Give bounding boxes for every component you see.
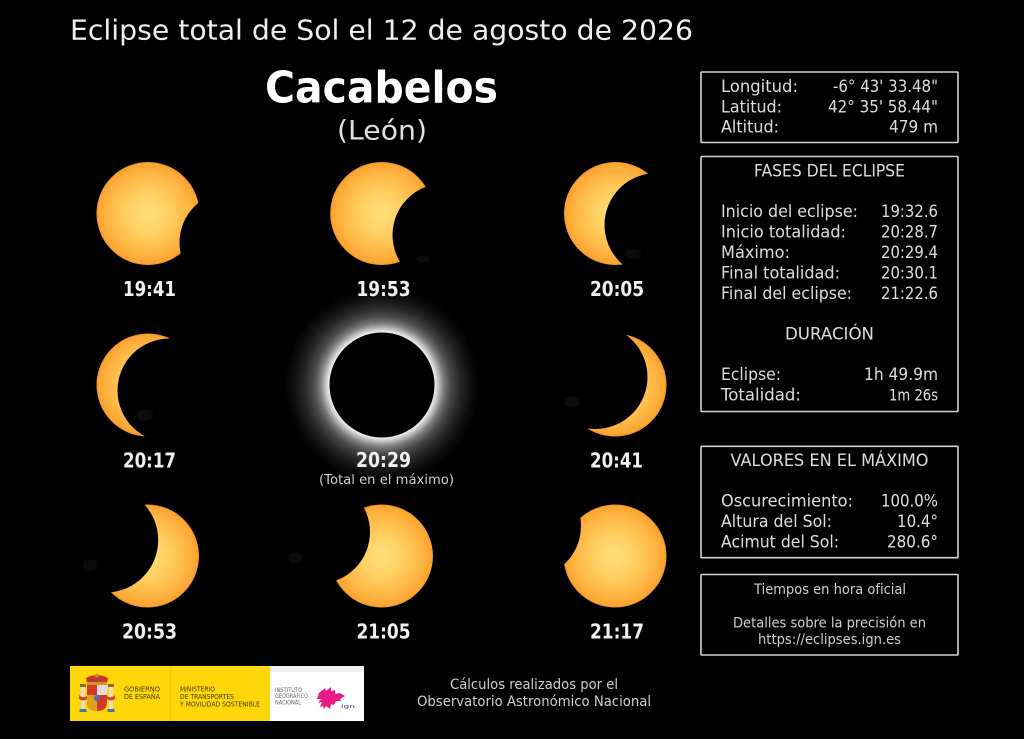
- panel: eclipse phases and duration: 19:32.6: [881, 202, 938, 222]
- logo text: institute: GEOGRÁFICO: [275, 693, 308, 700]
- panel: eclipse phases and duration: Final del eclipse:: [721, 284, 852, 304]
- totality with corona: [284, 287, 480, 483]
- phase 20:05: [564, 162, 708, 301]
- panel: values at maximum: 280.6°: [887, 532, 938, 552]
- panel: values at maximum: Altura del Sol:: [721, 512, 832, 532]
- logo text: ministry: [179, 686, 260, 708]
- panel: values at maximum: 100.0%: [881, 492, 938, 512]
- panel: eclipse phases and duration: 21:22.6: [881, 284, 938, 304]
- phase 19:41: [96, 162, 282, 301]
- panel: eclipse phases and duration: Inicio del eclipse:: [721, 202, 858, 222]
- phase 20:17: [96, 334, 222, 472]
- phase 19:53: [330, 162, 496, 301]
- logo text: institute: [275, 687, 308, 706]
- panel: values at maximum: [701, 446, 958, 558]
- phase 20:53: 20:53: [122, 620, 177, 644]
- panel: eclipse phases and duration: DURACIÓN: [785, 322, 874, 344]
- phase 20:17: 20:17: [123, 448, 176, 472]
- icon: coat of arms: [79, 674, 115, 712]
- title: Eclipse total de Sol el 12 de agosto de 2026: [70, 14, 693, 46]
- panel: coordinates: 42° 35' 58.44": [828, 97, 938, 117]
- panel: coordinates: Longitud:: [721, 77, 798, 97]
- total note: (Total en el máximo): [319, 472, 454, 488]
- logo text: government: [124, 686, 160, 701]
- panel: coordinates: -6° 43' 33.48": [833, 77, 938, 97]
- panel: notes: https://eclipses.ign.es: [758, 632, 901, 648]
- panel: coordinates: Latitud:: [721, 97, 782, 117]
- panel: eclipse phases and duration: Inicio totalidad:: [721, 222, 846, 242]
- phase 21:17: [477, 474, 666, 644]
- panel: eclipse phases and duration: 20:30.1: [881, 264, 938, 284]
- panel: eclipse phases and duration: [701, 156, 958, 412]
- panel: eclipse phases and duration: Final totalidad:: [721, 264, 840, 284]
- phase 21:05: 21:05: [356, 620, 410, 644]
- location name: Cacabelos: [265, 62, 498, 114]
- panel: notes: [701, 574, 958, 655]
- panel: eclipse phases and duration: Máximo:: [721, 243, 790, 263]
- phase 20:41: [544, 325, 666, 472]
- logo text: ministry: MINISTERIO: [180, 686, 215, 694]
- phase 19:53: 19:53: [356, 277, 410, 301]
- province: (León): [337, 116, 427, 146]
- panel: values at maximum: Acimut del Sol:: [721, 532, 839, 552]
- panel: coordinates: 479 m: [889, 118, 938, 138]
- panel: values at maximum: 10.4°: [897, 512, 938, 532]
- logo text: institute: INSTITUTO: [275, 687, 302, 694]
- phase 20:05: 20:05: [590, 277, 644, 301]
- icon: ign splash: [317, 687, 356, 710]
- panel: eclipse phases and duration: Eclipse:: [721, 365, 781, 385]
- panel: coordinates: Altitud:: [721, 118, 779, 138]
- credits: [417, 677, 651, 710]
- panel: values at maximum: VALORES EN EL MÁXIMO: [730, 449, 928, 471]
- icon: ign splash: ign: [341, 704, 356, 710]
- phase 21:17: 21:17: [590, 620, 644, 644]
- panel: notes: Tiempos en hora oficial: [753, 582, 906, 598]
- logo strip: [70, 666, 364, 721]
- phase 19:41: 19:41: [123, 277, 176, 301]
- phase 20:53: [53, 488, 199, 644]
- panel: eclipse phases and duration: 1m 26s: [889, 386, 938, 404]
- logo text: ministry: DE TRANSPORTES: [180, 693, 234, 701]
- panel: coordinates: [701, 72, 958, 142]
- credits: Cálculos realizados por el: [450, 677, 618, 693]
- logo text: institute: NACIONAL: [275, 700, 302, 706]
- panel: eclipse phases and duration: FASES DEL ECLIPSE: [754, 162, 905, 182]
- panel: values at maximum: Oscurecimiento:: [721, 492, 853, 512]
- panel: eclipse phases and duration: 20:28.7: [881, 222, 938, 242]
- time label 20:29: 20:29: [356, 448, 411, 472]
- phase 21:05: [267, 480, 433, 644]
- panel: eclipse phases and duration: Totalidad:: [720, 386, 801, 406]
- logo text: government: DE ESPAÑA: [124, 692, 160, 701]
- logo text: ministry: Y MOVILIDAD SOSTENIBLE: [179, 700, 260, 708]
- panel: eclipse phases and duration: 1h 49.9m: [864, 365, 938, 385]
- logo text: government: GOBIERNO: [124, 686, 160, 694]
- panel: notes: Detalles sobre la precisión en: [733, 616, 926, 632]
- phase 20:41: 20:41: [590, 448, 643, 472]
- credits: Observatorio Astronómico Nacional: [417, 694, 651, 710]
- panel: eclipse phases and duration: 20:29.4: [881, 243, 938, 263]
